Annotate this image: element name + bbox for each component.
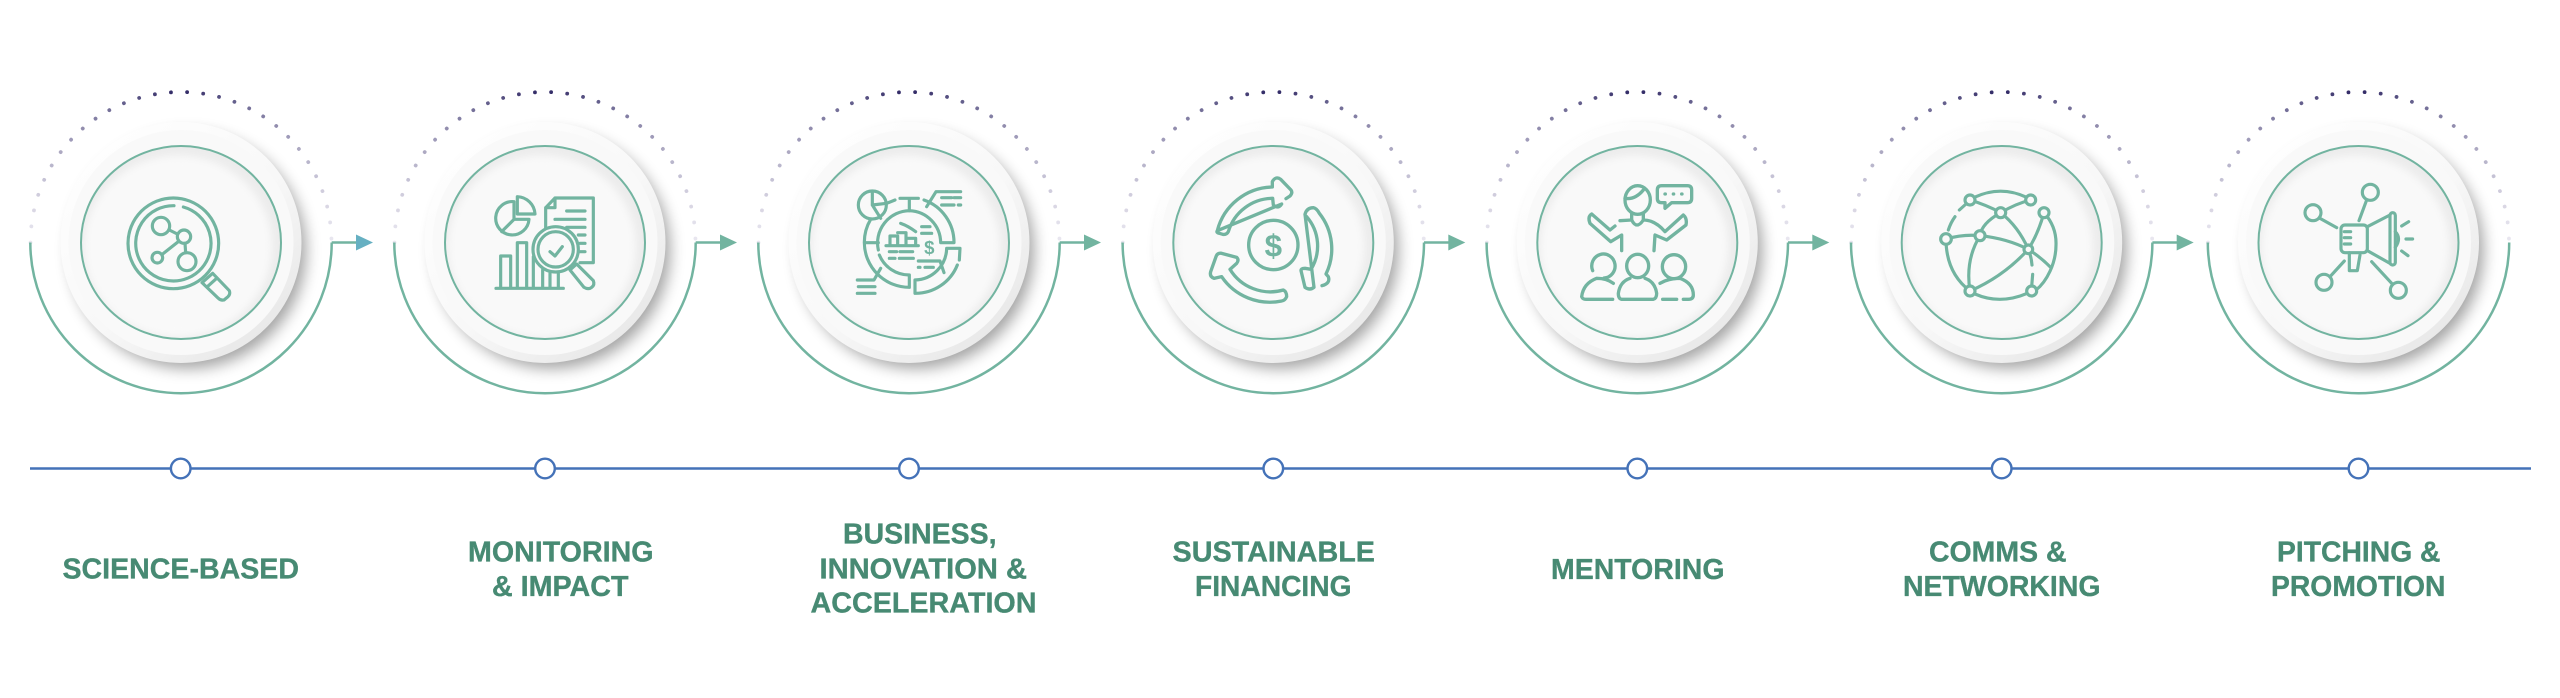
raised disc <box>60 122 306 368</box>
panel: step 4 sustainable financing <box>1121 90 1465 393</box>
timeline node 5 <box>1628 459 1647 478</box>
label: business, innovation and acceleration <box>810 518 1036 620</box>
icon: network globe <box>1941 191 2056 299</box>
label: comms and networking: COMMS & <box>1929 537 2067 569</box>
label: comms and networking: NETWORKING <box>1903 571 2100 603</box>
label: pitching and promotion: PROMOTION <box>2271 571 2446 603</box>
raised disc <box>788 122 1034 368</box>
panel: step 3 business, innovation and acceleration <box>757 90 1101 393</box>
label: sustainable financing <box>1172 537 1375 603</box>
icon: megaphone with network nodes <box>2305 184 2413 298</box>
solid arc <box>2208 242 2509 393</box>
raised disc <box>424 122 670 368</box>
raised disc <box>1153 122 1398 368</box>
arrow to step 2 <box>332 234 373 250</box>
arrow to step 5 <box>1424 234 1465 250</box>
label: monitoring and impact: & IMPACT <box>492 571 629 603</box>
label: business, innovation and acceleration: INNOVATION & <box>820 553 1027 585</box>
label: monitoring and impact: MONITORING <box>468 537 654 569</box>
icon: mentor speaking to audience <box>1582 186 1693 299</box>
panel: step 2 monitoring and impact <box>393 90 737 393</box>
icon: dollar coin in circular arrows <box>1210 178 1332 302</box>
panel: step 7 pitching and promotion <box>2206 90 2511 393</box>
timeline node 3 <box>899 459 919 478</box>
label: pitching and promotion <box>2271 537 2446 603</box>
dotted arc <box>1849 90 2154 244</box>
icon: magnifier with molecule <box>128 198 230 300</box>
label: sustainable financing: FINANCING <box>1195 571 1352 603</box>
dotted arc <box>1485 90 1790 244</box>
dotted arc <box>1121 90 1426 244</box>
label: pitching and promotion: PITCHING & <box>2277 537 2441 569</box>
label: business, innovation and acceleration: ACCELERATION <box>810 588 1036 620</box>
raised disc <box>1881 122 2127 368</box>
arrow to step 7 <box>2152 234 2194 250</box>
timeline node 2 <box>535 459 555 478</box>
solid arc <box>394 242 696 393</box>
panel: step 5 mentoring <box>1485 90 1829 393</box>
label: comms and networking <box>1903 537 2100 603</box>
arrow to step 3 <box>696 234 737 250</box>
label: mentoring: MENTORING <box>1551 554 1724 586</box>
dotted arc <box>393 90 697 244</box>
timeline node 6 <box>1992 459 2011 478</box>
panel: step 6 comms and networking <box>1849 90 2194 393</box>
label: business, innovation and acceleration: BUSINESS, <box>843 518 996 550</box>
dotted arc <box>2206 90 2511 244</box>
timeline node 4 <box>1264 459 1283 478</box>
dotted arc <box>29 90 333 244</box>
icon: charts and report under magnifier <box>496 197 594 289</box>
raised disc <box>1517 122 1762 368</box>
panel: step 1 science-based <box>29 90 373 393</box>
label: sustainable financing: SUSTAINABLE <box>1172 537 1375 569</box>
label: science-based: SCIENCE-BASED <box>62 553 299 585</box>
label: monitoring and impact <box>468 537 654 603</box>
raised disc <box>2238 122 2484 368</box>
solid arc <box>1851 242 2152 393</box>
icon: dollar coin in circular arrows: $ <box>1265 228 1282 263</box>
timeline node 7 <box>2349 459 2368 478</box>
dotted arc <box>757 90 1061 244</box>
solid arc <box>1123 242 1424 393</box>
arrow to step 4 <box>1060 234 1101 250</box>
arrow to step 6 <box>1788 234 1829 250</box>
timeline node 1 <box>171 459 190 478</box>
solid arc <box>758 242 1060 393</box>
icon: business cycle dashboard: $ <box>924 237 935 258</box>
solid arc <box>1487 242 1788 393</box>
solid arc <box>30 242 332 393</box>
timeline axis <box>30 459 2531 478</box>
icon: business cycle dashboard <box>857 191 961 293</box>
